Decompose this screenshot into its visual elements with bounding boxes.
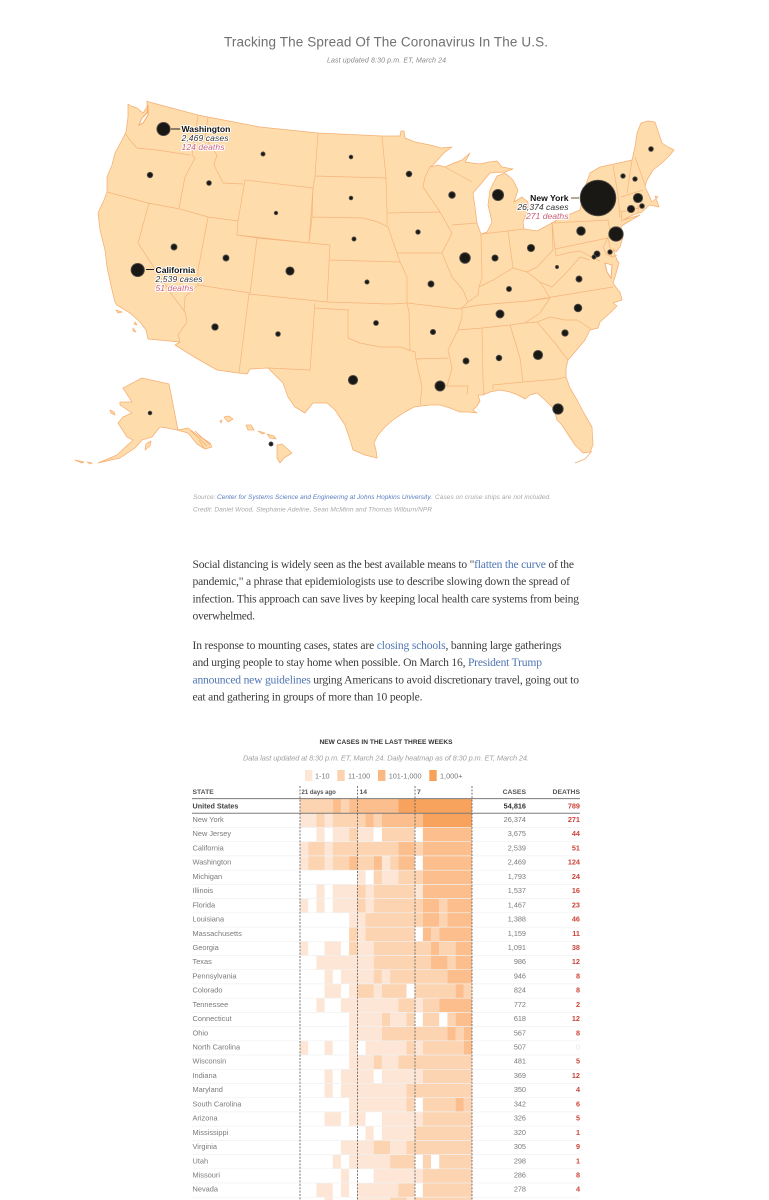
table row: Wisconsin <box>192 1057 580 1066</box>
table row: Tennessee <box>192 1000 580 1009</box>
paragraph: state responses: eat and gathering in groups of more than 10 people. <box>192 691 423 704</box>
table row: South Carolina: 342 <box>514 1099 526 1108</box>
table row: Virginia: 9 <box>576 1142 580 1151</box>
table row: Virginia: Virginia <box>192 1142 218 1151</box>
table row: New York: 26,374 <box>504 815 526 824</box>
table row: New York: New York <box>192 815 224 824</box>
table row: California: California <box>192 843 225 852</box>
table row: Texas: 986 <box>514 957 526 966</box>
table row: Georgia: 1,091 <box>508 943 526 952</box>
Aleutian Islands <box>75 410 151 464</box>
table row: Massachusetts: 1,159 <box>508 929 526 938</box>
table row: Maryland: 350 <box>514 1085 526 1094</box>
Alaska panhandle islands <box>191 431 210 448</box>
table row: Utah: Utah <box>192 1156 208 1165</box>
legend: 11-100 <box>348 772 370 780</box>
callout: Washington: 2,469 cases <box>180 133 229 143</box>
legend: 1,000+ <box>440 772 463 780</box>
table row: Ohio <box>192 1028 580 1037</box>
table row: Maryland <box>192 1085 581 1094</box>
callout: New York: New York <box>530 193 569 203</box>
paragraph: social distancing: pandemic," a phrase that epidemiologists use to describe slowing down the spread of <box>192 575 570 588</box>
table row: Nevada <box>192 1185 581 1194</box>
table row: Utah: 1 <box>576 1156 580 1165</box>
table row: Florida: 23 <box>572 900 580 909</box>
table row: Illinois: Illinois <box>192 886 213 895</box>
table header: 21 days ago <box>302 790 336 796</box>
paragraph: social distancing: infection. This approach can save lives by keeping local health care systems from being <box>192 592 579 605</box>
table row: North Carolina: 0 <box>576 1043 580 1052</box>
table row: Michigan <box>192 872 581 881</box>
table row: Ohio: Ohio <box>192 1028 208 1037</box>
table row: United States total <box>192 801 580 810</box>
paragraph: social distancing: overwhelmed. <box>192 610 255 623</box>
table row: South Carolina: 6 <box>576 1099 580 1108</box>
table row: North Carolina: 507 <box>514 1043 526 1052</box>
table row: Louisiana: Louisiana <box>192 915 225 924</box>
table row: Michigan: 1,793 <box>508 872 526 881</box>
table row: Nevada: 278 <box>514 1185 526 1194</box>
table row: Virginia <box>192 1142 580 1151</box>
table row: Mississippi: Mississippi <box>192 1128 229 1137</box>
table row: Wisconsin: 481 <box>514 1057 526 1066</box>
table row: Pennsylvania: 8 <box>576 971 580 980</box>
table row: Massachusetts: 11 <box>572 929 580 938</box>
table row: Missouri <box>192 1170 580 1180</box>
source and credit: Cases on cruise ships are not included. <box>435 494 551 501</box>
map: U.S. coronavirus cases by state <box>75 101 674 464</box>
table row: Wisconsin: 5 <box>576 1057 580 1066</box>
Florida Keys <box>575 451 592 463</box>
table row: Tennessee: 2 <box>576 1000 580 1009</box>
table row: Illinois <box>192 886 580 895</box>
table row: Arizona: 5 <box>576 1114 580 1123</box>
table header: DEATHS <box>553 789 580 796</box>
table row: Indiana: 12 <box>572 1071 580 1080</box>
table row: New York: 271 <box>568 815 580 824</box>
table row: United States total: 54,816 <box>504 801 526 810</box>
callout: California: California <box>156 265 195 275</box>
source and credit: Center for Systems Science and Engineering at Johns Hopkins University. <box>217 494 432 501</box>
table row: Indiana: Indiana <box>192 1071 218 1080</box>
heatmap table note: Data last updated at 8:30 p.m. ET, March 24. Daily heatmap as of 8:30 p.m. ET, March 24. <box>243 754 529 763</box>
table row: Tennessee: Tennessee <box>192 1000 228 1009</box>
table row: California <box>192 843 580 852</box>
table row: Michigan: 24 <box>572 872 581 881</box>
callout: Washington: 124 deaths <box>182 142 225 152</box>
legend: 1-10 <box>315 772 330 780</box>
table row: Washington: 2,469 <box>508 858 526 867</box>
state case circles <box>131 122 653 446</box>
Channel Islands <box>116 310 137 332</box>
state borders <box>107 115 645 405</box>
table header <box>192 789 580 796</box>
Chesapeake Bay <box>605 263 612 278</box>
table row: North Carolina <box>192 1042 580 1052</box>
table row: Indiana: 369 <box>514 1071 526 1080</box>
table row: New Jersey <box>192 829 581 838</box>
table row: Utah <box>192 1156 580 1165</box>
table row: Texas: Texas <box>192 957 212 966</box>
table row: Texas <box>192 957 580 966</box>
paragraph: state responses <box>192 639 579 704</box>
table row: Nevada: 4 <box>576 1185 581 1194</box>
table row: Utah: 298 <box>514 1156 526 1165</box>
table row: Mississippi: 320 <box>514 1128 526 1137</box>
table row: Virginia: 305 <box>514 1142 526 1151</box>
title: Tracking The Spread Of The Coronavirus In The U.S. <box>224 34 548 50</box>
source and credit: Credit: Daniel Wood, Stephanie Adeline, Sean McMinn and Thomas Wilburn/NPR <box>193 506 432 514</box>
table row: Tennessee: 772 <box>514 1000 526 1009</box>
table header: CASES <box>503 789 526 796</box>
Puget Sound <box>139 105 148 125</box>
table row: Colorado: 8 <box>576 986 580 995</box>
paragraph: state responses: and urging people to stay home when possible. On March 16, President Trump <box>192 656 542 669</box>
table row: Connecticut: Connecticut <box>192 1014 232 1023</box>
table row: Massachusetts: Massachusetts <box>192 929 242 938</box>
table row: Michigan: Michigan <box>192 872 222 881</box>
callout: Washington: Washington <box>182 124 230 134</box>
table row: United States total: 789 <box>568 801 580 810</box>
table header: 7 <box>417 789 421 796</box>
table row: Colorado: 824 <box>514 986 526 995</box>
table row: Connecticut: 618 <box>514 1014 526 1023</box>
source and credit <box>193 494 551 514</box>
Alaska <box>98 378 212 463</box>
last updated note: Last updated 8:30 p.m. ET, March 24 <box>327 58 446 64</box>
table row: Illinois: 16 <box>572 886 580 895</box>
table row: South Carolina: South Carolina <box>192 1099 242 1108</box>
table row: Missouri: Missouri <box>192 1171 220 1180</box>
table row: New York <box>192 815 580 824</box>
table row: New Jersey: New Jersey <box>192 829 231 838</box>
table row: Texas: 12 <box>572 957 580 966</box>
callout: New York: 271 deaths <box>525 211 569 221</box>
table row: Connecticut <box>192 1014 580 1023</box>
source and credit: Source: <box>193 494 216 501</box>
table row: Louisiana <box>192 914 580 924</box>
callout: New York: 26,374 cases <box>516 202 569 212</box>
table row: Illinois: 1,537 <box>508 886 526 895</box>
table row: North Carolina: North Carolina <box>192 1043 241 1052</box>
table row: Pennsylvania <box>192 971 580 980</box>
paragraph: social distancing: Social distancing is widely seen as the best available means to "flatten the curve of the <box>192 558 574 571</box>
table row: Arizona: Arizona <box>192 1114 218 1123</box>
legend <box>305 770 463 781</box>
callout: California: 2,539 cases <box>154 274 203 284</box>
table row: Wisconsin: Wisconsin <box>192 1057 226 1066</box>
table row: Florida: 1,467 <box>508 900 526 909</box>
table row: Arizona <box>192 1114 580 1123</box>
heatmap table heading: NEW CASES IN THE LAST THREE WEEKS <box>320 739 453 746</box>
table row: Georgia: 38 <box>572 943 580 952</box>
table row: Mississippi <box>192 1128 580 1137</box>
callout: New York <box>516 193 579 221</box>
table row: South Carolina <box>192 1099 580 1108</box>
table row: New Jersey: 3,675 <box>508 829 526 838</box>
callout: California <box>146 265 203 293</box>
table row: Georgia: Georgia <box>192 943 220 952</box>
table row: California: 2,539 <box>508 843 526 852</box>
table row: Arizona: 326 <box>514 1114 526 1123</box>
table row: Colorado: Colorado <box>192 986 222 995</box>
paragraph: state responses: announced new guidelines urging Americans to avoid discretionary travel, going out to <box>192 673 579 686</box>
table row: Connecticut: 12 <box>572 1014 580 1023</box>
paragraph: state responses: In response to mounting cases, states are closing schools, banning large gatherings <box>192 639 562 652</box>
table row: Louisiana: 1,388 <box>508 915 526 924</box>
table row: Washington: Washington <box>192 858 231 867</box>
table row: Ohio: 8 <box>576 1028 580 1037</box>
table row: Louisiana: 46 <box>572 915 580 924</box>
table row: Pennsylvania: Pennsylvania <box>192 971 237 980</box>
legend: 101-1,000 <box>389 772 422 780</box>
table row: Colorado <box>192 986 580 995</box>
callout: California: 51 deaths <box>156 283 194 293</box>
table row: Indiana <box>192 1071 580 1080</box>
table header: 14 <box>360 789 367 796</box>
contiguous U.S. landmass <box>98 101 674 458</box>
table row: partially visible next state <box>325 1197 472 1200</box>
paragraph: social distancing <box>192 558 579 623</box>
table row: United States total: United States <box>192 801 238 810</box>
table row: Maryland: Maryland <box>192 1085 223 1094</box>
table header: STATE <box>192 789 214 796</box>
table row: Ohio: 567 <box>514 1028 526 1037</box>
table row: Missouri: 8 <box>576 1171 580 1180</box>
table row: Florida: Florida <box>192 900 216 909</box>
table row: Georgia <box>192 943 580 952</box>
table row: Maryland: 4 <box>576 1085 581 1094</box>
callout: Washington <box>171 124 230 152</box>
table row: Mississippi: 1 <box>576 1128 580 1137</box>
table row: Washington: 124 <box>568 858 581 867</box>
table row: Massachusetts <box>192 929 580 938</box>
table row: Missouri: 286 <box>514 1171 526 1180</box>
table row: Washington <box>192 858 581 867</box>
table row: Pennsylvania: 946 <box>514 971 526 980</box>
table row: California: 51 <box>572 843 580 852</box>
table row: Florida <box>192 900 580 909</box>
table row: New Jersey: 44 <box>572 829 581 838</box>
Hawaii <box>220 416 292 463</box>
table row: Nevada: Nevada <box>192 1185 219 1194</box>
